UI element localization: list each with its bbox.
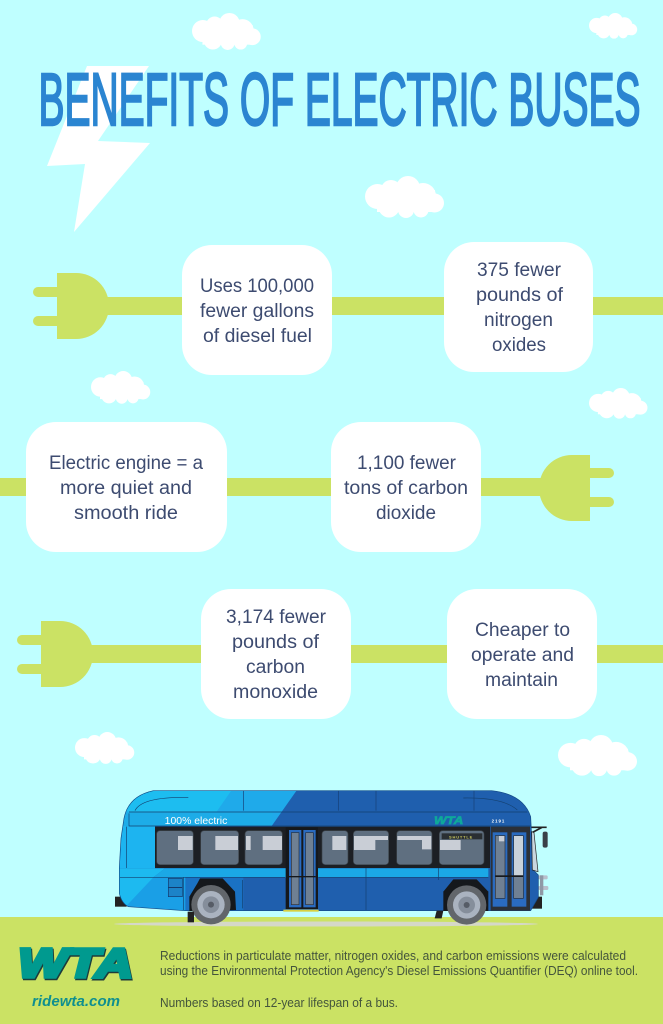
card: cheaper to operate — [447, 589, 597, 719]
ground panel — [0, 917, 663, 1024]
card: carbon monoxide: pounds of — [232, 632, 320, 653]
footnote text: Reductions in particulate matter, nitrogen oxides, and carbon emissions were calculated — [160, 949, 626, 963]
logo: WTA: WTA — [19, 942, 134, 988]
bus lettering: WTA: WTA — [434, 815, 463, 827]
card: nitrogen oxides: 375 fewer — [477, 260, 562, 281]
card: quiet ride: more quiet and — [60, 478, 192, 499]
icon: lightning bolt — [47, 66, 150, 232]
card: carbon monoxide: 3,174 fewer — [226, 607, 327, 628]
logo: WTA: WTA — [18, 940, 133, 986]
card: diesel fuel: Uses 100,000 — [200, 276, 314, 297]
body — [119, 790, 539, 911]
windows — [157, 831, 484, 865]
destination sign — [442, 833, 482, 839]
card: quiet ride — [26, 422, 227, 552]
bus number: 2191 — [492, 818, 505, 823]
bumpers and grille — [115, 875, 548, 909]
footnote text: using the Environmental Protection Agency's Diesel Emissions Quantifier (DEQ) online tool. — [160, 964, 638, 978]
card: diesel fuel: of diesel fuel — [203, 326, 312, 347]
cloud: lower right — [558, 735, 637, 776]
mid stripe — [153, 868, 488, 877]
card: nitrogen oxides: nitrogen — [484, 310, 553, 331]
roof and panel lines — [120, 797, 531, 910]
middle doors — [283, 827, 319, 912]
card: cheaper to operate: Cheaper to — [475, 620, 570, 641]
card: quiet ride: Electric engine = a — [49, 453, 203, 474]
card: diesel fuel: fewer gallons — [200, 301, 314, 322]
mirror — [531, 827, 548, 848]
cloud: top right — [589, 13, 637, 39]
card: carbon dioxide — [331, 422, 481, 552]
window reflections — [178, 836, 461, 850]
cloud: mid — [365, 176, 444, 218]
card: nitrogen oxides: pounds of — [476, 285, 564, 306]
front doors — [491, 827, 530, 911]
card: carbon dioxide: 1,100 fewer — [357, 453, 457, 474]
card: carbon monoxide: carbon — [246, 657, 305, 678]
rear wheel — [188, 878, 236, 924]
cloud: right above row two — [589, 388, 647, 419]
card: carbon monoxide: monoxide — [233, 682, 318, 703]
destination sign: SHUTTLE — [449, 834, 473, 839]
power cord row two with plug — [0, 455, 614, 521]
card: quiet ride: smooth ride — [74, 503, 178, 524]
card: carbon dioxide: dioxide — [376, 503, 436, 524]
front wheel — [435, 879, 488, 925]
website link: ridewta.com — [32, 993, 120, 1010]
cloud: left below row one — [91, 371, 150, 404]
cloud: lower left — [75, 732, 134, 764]
card: nitrogen oxides — [444, 242, 593, 372]
power cord row three with plug — [17, 621, 663, 687]
card: diesel fuel — [182, 245, 332, 375]
bus lettering: 100% electric: 100% electric — [165, 816, 228, 827]
footnote text: Numbers based on 12-year lifespan of a bus. — [160, 996, 398, 1010]
card: carbon monoxide — [201, 589, 351, 719]
illustration: electric bus — [110, 780, 550, 925]
footnote text — [160, 949, 638, 1010]
rear hatches — [168, 878, 182, 897]
card: cheaper to operate: maintain — [485, 670, 558, 691]
card: carbon dioxide: tons of carbon — [344, 478, 468, 499]
card: nitrogen oxides: oxides — [492, 335, 546, 356]
road shadow — [114, 922, 538, 926]
window band — [155, 827, 490, 868]
front section and windshield — [532, 832, 538, 872]
cloud: top center — [192, 13, 261, 50]
card: cheaper to operate: operate and — [471, 645, 574, 666]
power cord row one with plug — [33, 273, 663, 339]
